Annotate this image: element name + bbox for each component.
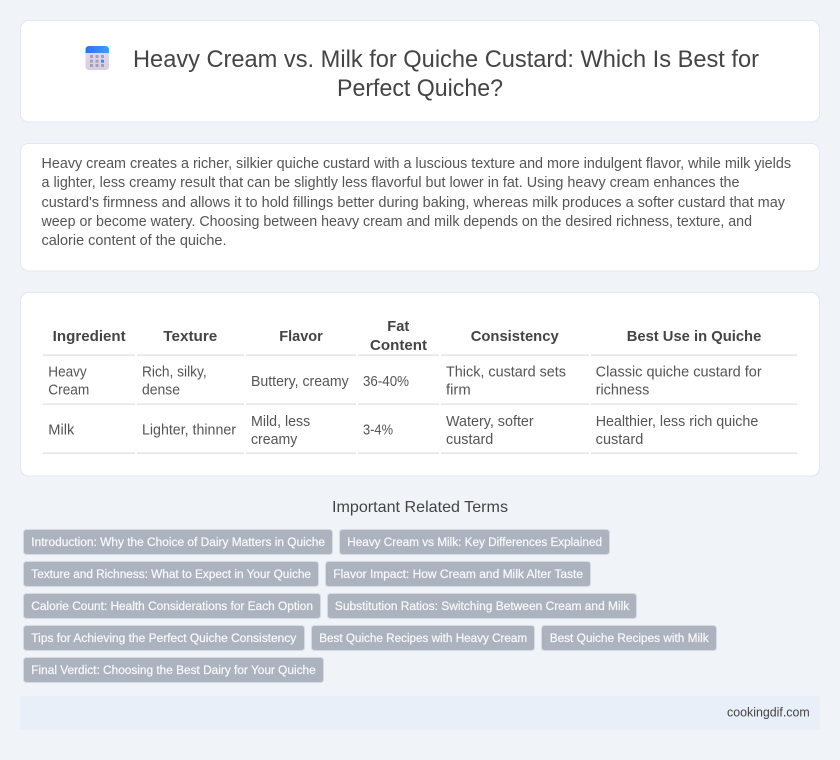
summary text: a lighter, less creamy result that can be slightly less flavorful but lower in fat. Using heavy cream enhances the	[42, 175, 740, 191]
footer source text: cookingdif.com	[727, 706, 810, 720]
tag: key differences: Heavy Cream vs Milk: Key Differences Explained	[347, 535, 602, 549]
tag: tips: Tips for Achieving the Perfect Quiche Consistency	[31, 631, 297, 645]
tag: introduction: Introduction: Why the Choice of Dairy Matters in Quiche	[31, 535, 325, 549]
table row: milk: Mild, less	[251, 414, 310, 430]
table row: heavy cream: Classic quiche custard for	[596, 365, 762, 381]
panel: summary	[20, 144, 820, 271]
summary text: calorie content of the quiche.	[42, 233, 226, 249]
summary text: Heavy cream creates a richer, silkier quiche custard with a luscious texture and more indulgent flavor, while milk yields	[42, 156, 791, 172]
table header row: Content	[370, 337, 427, 354]
table header row: Fat	[387, 318, 409, 335]
panel: header	[20, 20, 820, 122]
title: Perfect Quiche?	[337, 75, 503, 102]
table row: heavy cream: Heavy	[48, 365, 87, 381]
tag: flavor impact	[326, 562, 590, 586]
table row: milk: Watery, softer	[446, 414, 534, 430]
table row: milk: 3-4%	[363, 423, 393, 439]
tag: calorie count: Calorie Count: Health Considerations for Each Option	[31, 599, 313, 613]
summary text	[41, 156, 791, 249]
icon: calendar	[86, 46, 109, 70]
table row: heavy cream: richness	[596, 383, 649, 399]
tag: recipes with milk: Best Quiche Recipes with Milk	[550, 631, 709, 645]
table row: milk: custard	[596, 432, 643, 448]
table row: heavy cream: Rich, silky,	[142, 365, 207, 381]
table header row: Flavor	[279, 328, 323, 345]
table row: milk	[48, 414, 758, 448]
table header row	[53, 318, 761, 354]
related terms tags	[24, 530, 716, 682]
tag: texture and richness	[24, 562, 318, 586]
table row: heavy cream: 36-40%	[363, 374, 409, 390]
table row: heavy cream: Cream	[48, 383, 89, 399]
table row: milk: Milk	[48, 423, 75, 439]
table row: milk: creamy	[251, 432, 298, 448]
tag: introduction	[24, 530, 332, 554]
tag: final verdict	[24, 658, 324, 682]
table header row: Best Use in Quiche	[627, 328, 761, 345]
table row: heavy cream: firm	[446, 383, 471, 399]
table row: heavy cream: dense	[142, 383, 180, 399]
tag: key differences	[340, 530, 610, 554]
summary text: weep or become watery. Choosing between heavy cream and milk depends on the desired richness, texture, and	[41, 214, 752, 230]
tag: substitution ratios: Substitution Ratios: Switching Between Cream and Milk	[335, 599, 630, 613]
tag: calorie count	[24, 594, 320, 618]
table header row: Consistency	[471, 328, 559, 345]
title: Heavy Cream vs. Milk for Quiche Custard: Which Is Best for	[133, 46, 759, 73]
table header row: Ingredient	[53, 328, 126, 345]
tag: flavor impact: Flavor Impact: How Cream and Milk Alter Taste	[333, 567, 583, 581]
tag: substitution ratios	[328, 594, 636, 618]
tag: tips	[24, 626, 304, 650]
footer	[20, 696, 820, 730]
table row: milk: Lighter, thinner	[142, 423, 236, 439]
summary text: custard's firmness and allows it to hold fillings better during baking, whereas milk produces a softer custard that may	[42, 195, 786, 211]
tag: recipes with heavy cream: Best Quiche Recipes with Heavy Cream	[319, 631, 527, 645]
table row: milk: custard	[446, 432, 493, 448]
tag: texture and richness: Texture and Richness: What to Expect in Your Quiche	[31, 567, 311, 581]
tag: recipes with milk	[542, 626, 716, 650]
table row: heavy cream: Buttery, creamy	[251, 374, 349, 390]
table row: heavy cream: Thick, custard sets	[446, 365, 566, 381]
table header row: Texture	[163, 328, 217, 345]
panel: comparison table	[20, 292, 820, 476]
tag: final verdict: Final Verdict: Choosing the Best Dairy for Your Quiche	[31, 663, 316, 677]
tag: recipes with heavy cream	[312, 626, 534, 650]
table row: milk: Healthier, less rich quiche	[596, 414, 758, 430]
heading: important related terms: Important Related Terms	[332, 499, 508, 516]
title	[133, 46, 759, 102]
table row: heavy cream	[48, 365, 762, 399]
